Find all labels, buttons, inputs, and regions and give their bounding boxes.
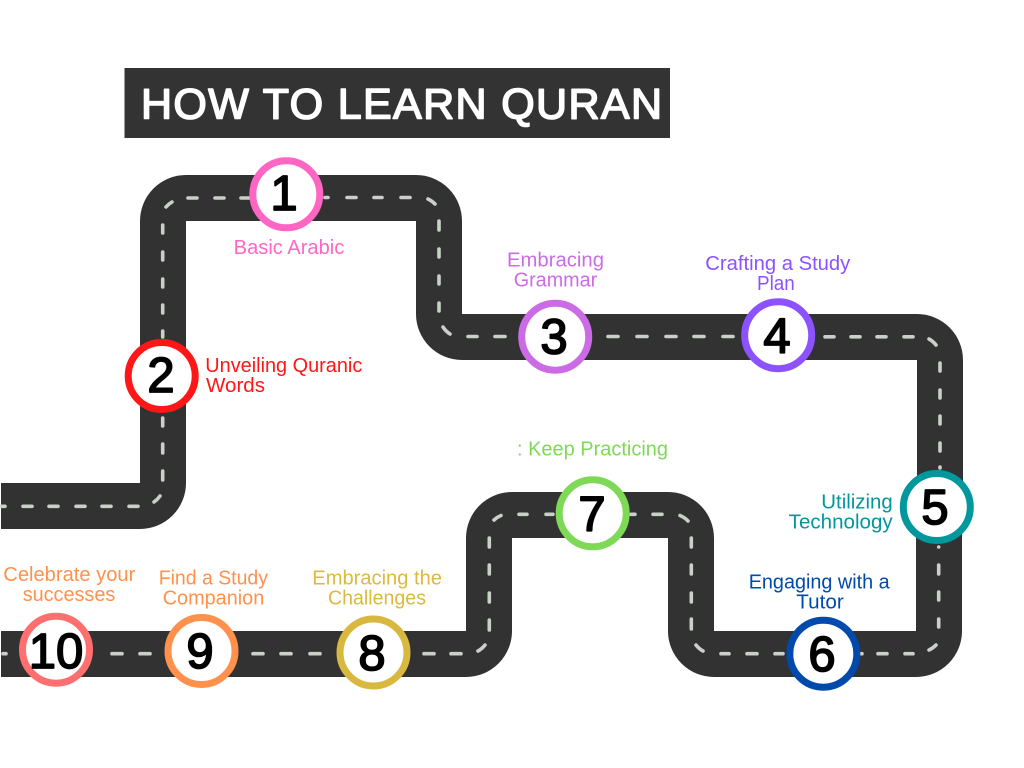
step 1: Basic Arabic — [234, 161, 344, 259]
step 5: Utilizing Technology: Technology — [789, 511, 893, 533]
step 7: Keep Practicing: 7 — [578, 488, 606, 542]
step 7: Keep Practicing — [517, 439, 668, 547]
step 4: Crafting a Study Plan: 4 — [763, 310, 791, 364]
step 2: Unveiling Quranic Words: 2 — [147, 349, 175, 403]
step 3: Embracing Grammar — [507, 250, 604, 370]
step 7: Keep Practicing: : Keep Practicing — [517, 439, 668, 461]
winding road — [1, 198, 940, 654]
step 10: Celebrate your successes — [3, 564, 136, 683]
step 6: Engaging with a Tutor — [749, 571, 891, 687]
step 9: Find a Study Companion: 9 — [186, 625, 214, 679]
step 8: Embracing the Challenges — [312, 567, 442, 686]
step 8: Embracing the Challenges: Embracing the — [312, 567, 442, 589]
step 9: Find a Study Companion — [159, 567, 268, 684]
step 5: Utilizing Technology: Utilizing — [821, 491, 893, 513]
step 8: Embracing the Challenges: 8 — [358, 627, 386, 681]
title banner — [124, 68, 670, 138]
step 9: Find a Study Companion: Companion — [163, 587, 264, 609]
step 6: Engaging with a Tutor: 6 — [808, 628, 836, 682]
step 3: Embracing Grammar: Grammar — [514, 270, 598, 292]
step 10: Celebrate your successes: Celebrate your — [3, 564, 136, 586]
step 3: Embracing Grammar: Embracing — [507, 250, 604, 272]
step 4: Crafting a Study Plan: Crafting a Study — [705, 253, 850, 275]
step 6: Engaging with a Tutor: Tutor — [796, 591, 844, 613]
step 2: Unveiling Quranic Words — [128, 342, 362, 410]
step 1: Basic Arabic: 1 — [270, 167, 298, 221]
step 4: Crafting a Study Plan — [705, 253, 850, 369]
step 3: Embracing Grammar: 3 — [540, 310, 568, 364]
step 1: Basic Arabic: Basic Arabic — [234, 237, 344, 259]
step 2: Unveiling Quranic Words: Words — [206, 375, 265, 397]
step 4: Crafting a Study Plan: Plan — [757, 273, 795, 295]
step 10: Celebrate your successes: 10 — [29, 625, 83, 679]
step 6: Engaging with a Tutor: Engaging with a — [749, 571, 891, 593]
step 5: Utilizing Technology: 5 — [921, 481, 949, 535]
step 9: Find a Study Companion: Find a Study — [159, 567, 268, 589]
step 5: Utilizing Technology — [789, 474, 970, 540]
step 8: Embracing the Challenges: Challenges — [328, 587, 426, 609]
title text: HOW TO LEARN QURAN — [141, 80, 662, 128]
step 10: Celebrate your successes: successes — [23, 584, 115, 606]
step 2: Unveiling Quranic Words: Unveiling Quranic — [205, 355, 362, 377]
